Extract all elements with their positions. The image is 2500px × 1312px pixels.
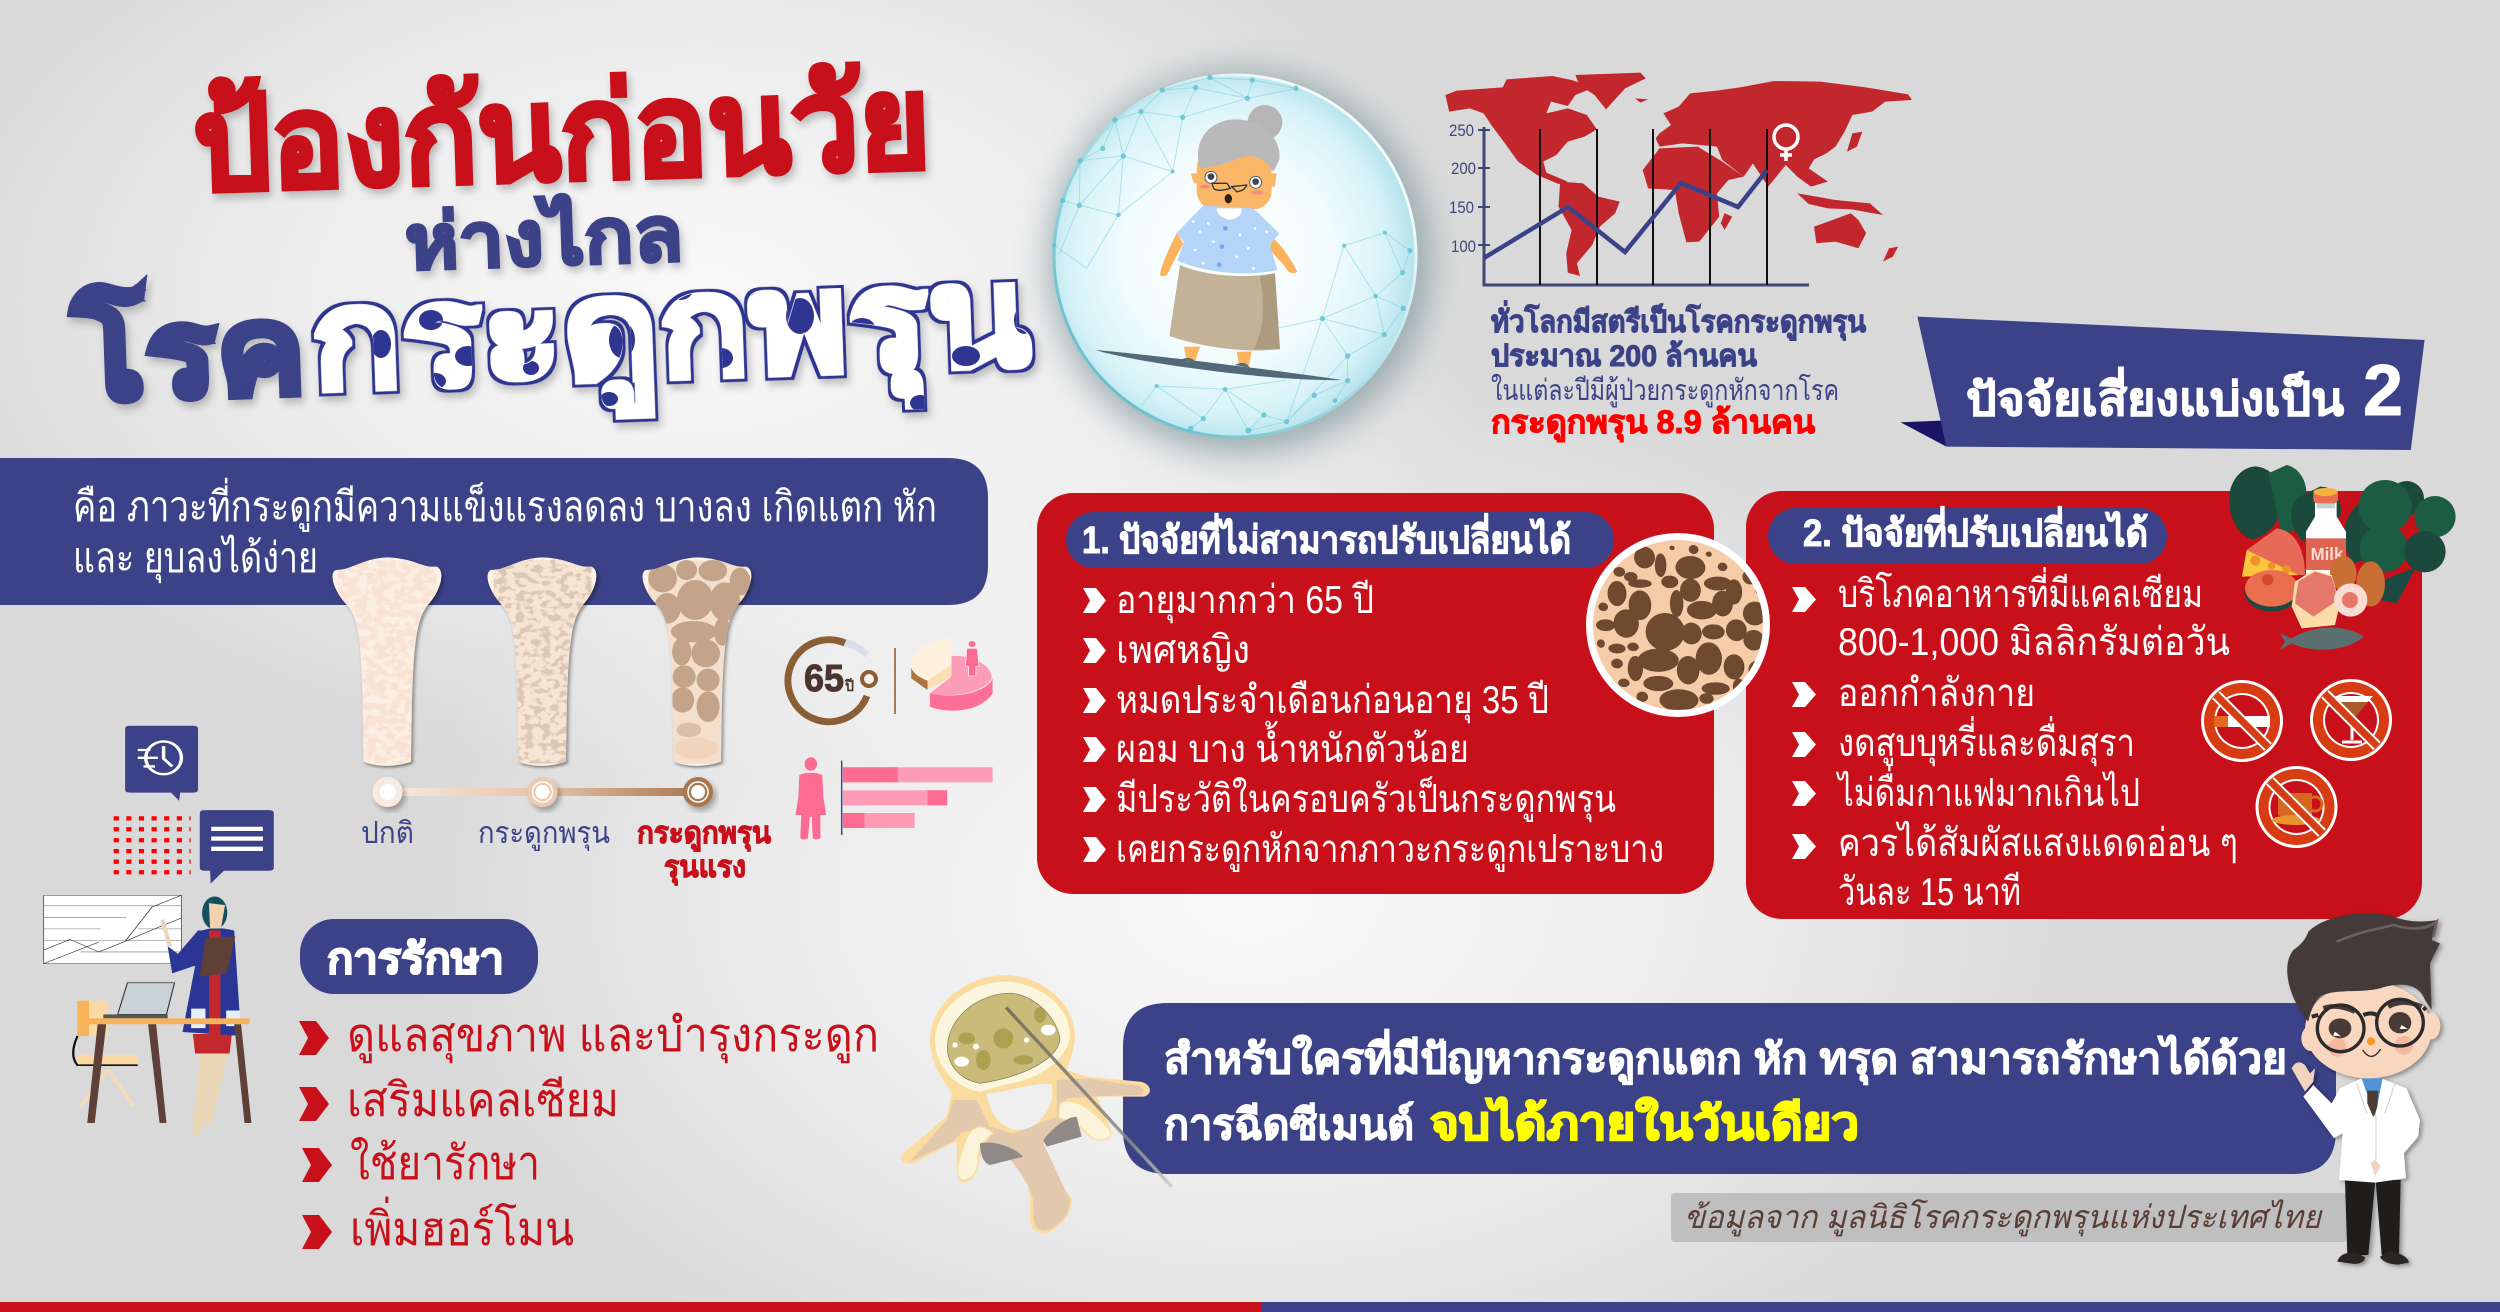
panel 2 list: วันละ 15 นาที [1838, 871, 2021, 914]
ribbon: risk factor heading: 2 [2363, 351, 2403, 431]
panel 2 list: ไม่ดื่มกาแฟมากเกินไป [1836, 766, 2140, 815]
bone: normal [333, 557, 441, 766]
chart tick labels: 200 [1451, 159, 1476, 178]
world stats text: กระดูกพรุน 8.9 ล้านคน [1491, 404, 1815, 443]
illustration: presenter at desk [44, 726, 274, 1137]
treatment heading: การรักษา [327, 935, 504, 982]
fish [2280, 627, 2364, 650]
milk bottle [2306, 488, 2346, 577]
source note: ข้อมูลจาก มูลนิธิโรคกระดูกพรุนแห่งประเทศไทย [1684, 1199, 2323, 1237]
panel 1 list: หมดประจำเดือนก่อนอายุ 35 ปี [1116, 679, 1549, 724]
divider and pie chart [894, 638, 993, 714]
icon: age 65 ring: ปี [844, 678, 854, 695]
illustration: vertebra with needle [901, 975, 1172, 1233]
icon: no alcohol [2310, 679, 2392, 761]
panel: modifiable factors [1746, 491, 2422, 919]
icon: age 65 ring: 65 [804, 658, 844, 700]
callout: cement treatment band [1123, 1003, 2336, 1174]
panel 1 list: อายุมากกว่า 65 ปี [1116, 579, 1374, 624]
illustration: doctor [2287, 913, 2440, 1265]
icon: age 65 ring [788, 640, 876, 722]
bone: severe [643, 557, 751, 766]
treatment list: ดูแลสุขภาพ และบำรุงกระดูก [347, 1008, 879, 1064]
panel 1 list: ผอม บาง น้ำหนักตัวน้อย [1116, 720, 1469, 771]
world stats text: ในแต่ละปีมีผู้ป่วยกระดูกหักจากโรค [1491, 373, 1839, 408]
doctor head [2287, 913, 2440, 1078]
globe mesh [1052, 75, 1413, 434]
world stats text: ประมาณ 200 ล้านคน [1491, 340, 1757, 373]
desk, laptop and chair [73, 983, 251, 1123]
title [69, 49, 1034, 428]
globe with grandma [1048, 70, 1432, 454]
bone: osteoporosis [488, 557, 596, 766]
stage dot: severe [683, 777, 713, 807]
bone labels: ปกติ [361, 817, 414, 850]
doctor legs and shoes [2337, 1180, 2409, 1265]
panel: definition: และ ยุบลงได้ง่าย [73, 534, 318, 584]
panel: definition [0, 458, 988, 605]
chart tick labels [1449, 121, 1476, 256]
world stats text: ทั่วโลกมีสตรีเป็นโรคกระดูกพรุน [1491, 300, 1866, 341]
whiteboard chart [44, 895, 181, 964]
illustration: porous bone cross-section [1586, 533, 1770, 717]
stage dot: normal [372, 777, 402, 807]
red dot grid [114, 818, 191, 872]
icon: female symbol [1774, 125, 1798, 161]
callout: cement treatment band: สำหรับใครที่มีปัญหากระดูกแตก หัก ทรุด สามารถรักษาได้ด้วย [1164, 1029, 2287, 1085]
panel 2 list [1792, 567, 2238, 914]
panel 1 list: เคยกระดูกหักจากภาวะกระดูกเปราะบาง [1116, 828, 1664, 872]
title line 3b: osteoporosis word: กระดูกพรุน [309, 237, 1033, 428]
bone labels: กระดูกพรุน [637, 817, 771, 852]
icon: no coffee [2256, 766, 2338, 848]
ribbon: risk factor heading: ปัจจัยเสี่ยงแบ่งเป็น [1966, 367, 2345, 425]
panel 2 list: 800-1,000 มิลลิกรัมต่อวัน [1838, 621, 2230, 664]
panel 1 list: เพศหญิง [1116, 629, 1250, 672]
bone labels: รุนแรง [664, 851, 746, 886]
bone labels: กระดูกพรุน [478, 817, 610, 852]
panel 2 list: บริโภคอาหารที่มีแคลเซียม [1838, 567, 2203, 616]
world map [1445, 73, 1912, 276]
callout: cement treatment band: จบได้ภายในวันเดียว [1430, 1096, 1859, 1149]
chart axes and lines [1478, 127, 1809, 285]
ribbon: risk factor heading [1901, 317, 2425, 450]
title line 2: ห่างไกล [404, 190, 684, 286]
speech bubble: lines [200, 810, 274, 884]
world stats text [1491, 300, 1866, 443]
chart tick labels: 150 [1449, 198, 1474, 217]
eggs and meat [2292, 556, 2385, 628]
kale [2229, 465, 2341, 542]
title line 1: ป้องกันก่อนวัย [191, 49, 933, 218]
milk bottle: Milk [2311, 544, 2344, 564]
callout: cement treatment band: การฉีดซีเมนต์ [1164, 1101, 1414, 1148]
chart tick labels: 100 [1451, 237, 1476, 256]
panel 2 list: งดสูบบุหรี่และดื่มสุรา [1838, 716, 2135, 767]
cheese and ham [2242, 528, 2305, 612]
presenter [161, 896, 241, 1137]
bottom colour bar [0, 1302, 2500, 1312]
severity timeline [372, 777, 713, 807]
world map chart [1445, 73, 1912, 285]
panel 2 heading [1768, 506, 2167, 564]
broccoli [2344, 480, 2456, 603]
speech bubble: clock [125, 726, 198, 801]
panel 1 list [1083, 579, 1664, 872]
grandma [1095, 105, 1342, 380]
treatment list: เพิ่มฮอร์โมน [350, 1196, 574, 1255]
panel 2 heading: 2. ปัจจัยที่ปรับเปลี่ยนได้ [1803, 506, 2148, 555]
chart tick labels: 250 [1449, 121, 1474, 140]
panel 1 list: มีประวัติในครอบครัวเป็นกระดูกพรุน [1116, 775, 1616, 823]
treatment list [299, 1008, 879, 1255]
panel 2 list: ออกกำลังกาย [1838, 672, 2035, 715]
bone comparison [333, 557, 751, 766]
bone labels [361, 817, 771, 886]
panel 2 list: ควรได้สัมผัสแสงแดดอ่อน ๆ [1838, 821, 2238, 865]
treatment list: ใช้ยารักษา [350, 1136, 540, 1189]
illustration: calcium foods [2229, 465, 2456, 650]
needle [1006, 1007, 1172, 1187]
title line 3b: osteoporosis word [310, 278, 1042, 432]
doctor coat [2292, 1062, 2420, 1183]
title line 3a: โรค [69, 278, 308, 427]
panel 1 heading: 1. ปัจจัยที่ไม่สามารถปรับเปลี่ยนได้ [1082, 513, 1571, 562]
vertebra bone [901, 975, 1150, 1233]
treatment list: เสริมแคลเซียม [347, 1073, 619, 1126]
panel: definition: คือ ภาวะที่กระดูกมีความแข็งแรงลดลง บางลง เกิดแตก หัก [73, 478, 937, 532]
icon: woman with bars [796, 757, 993, 839]
panel: non-modifiable factors [1037, 493, 1714, 894]
icon: no smoking [2201, 680, 2283, 762]
treatment heading [300, 919, 538, 994]
stage dot: osteoporosis [528, 777, 558, 807]
